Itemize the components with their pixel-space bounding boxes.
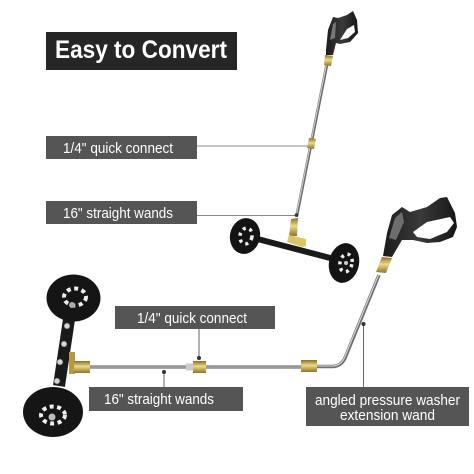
callout: lower straight wands: 16" straight wands <box>104 391 214 408</box>
callout: upper quick connect: 1/4" quick connect <box>63 140 174 157</box>
callout: lower straight wands <box>89 370 243 411</box>
title: Easy to Convert <box>55 36 228 64</box>
callout: lower quick connect: 1/4" quick connect <box>137 310 248 327</box>
callout: angled wand <box>306 322 469 426</box>
lower straight wand <box>88 364 302 370</box>
upper brass couplers <box>307 55 333 149</box>
upper surface cleaner bar <box>250 218 334 259</box>
callout: upper straight wands: 16" straight wands <box>63 205 173 222</box>
callout: upper straight wands <box>46 201 296 224</box>
lower brass couplers <box>69 257 392 374</box>
angled extension wand <box>315 275 379 366</box>
callout: lower quick connect <box>115 306 275 360</box>
upper left wheel <box>227 215 263 257</box>
callout: angled wand: extension wand <box>340 407 435 424</box>
lower spray gun <box>383 197 457 257</box>
upper right wheel <box>325 240 363 286</box>
title <box>46 32 237 70</box>
callout: upper quick connect <box>46 136 309 159</box>
assembled upright cleaner <box>227 11 363 286</box>
bar fittings <box>54 306 73 384</box>
lower bottom wheel <box>23 387 83 437</box>
lower left bar <box>59 306 71 386</box>
disassembled parts <box>23 197 457 437</box>
upper spray gun <box>326 11 358 55</box>
callout: angled wand: angled pressure washer <box>315 392 460 409</box>
upper wand <box>295 64 327 217</box>
lower top wheel <box>46 274 100 322</box>
